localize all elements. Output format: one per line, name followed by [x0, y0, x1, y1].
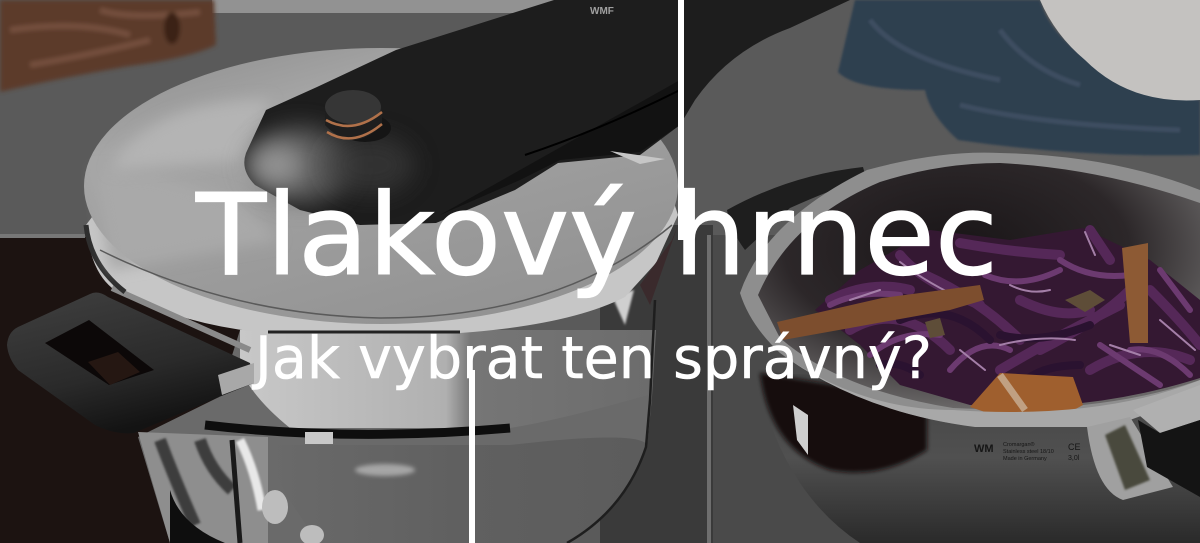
- right pot: [727, 153, 1200, 543]
- pot engraving: WM: [974, 443, 994, 455]
- pot engraving: 3,0l: [1068, 455, 1080, 462]
- subtitle: Jak vybrat ten správný?: [252, 324, 932, 392]
- black lid handle: [244, 0, 850, 225]
- pot engraving: [974, 441, 1081, 462]
- white vertical line bottom: [469, 370, 475, 543]
- pot engraving: Made in Germany: [1003, 456, 1047, 462]
- left pot handle: [7, 293, 254, 433]
- pressure cooker lid: [84, 48, 678, 350]
- left pot body: [138, 290, 656, 543]
- white vertical line top: [678, 0, 684, 240]
- right pot side handle: [1087, 385, 1200, 500]
- title: Tlakový hrnec: [195, 171, 998, 301]
- pot engraving: Cromargan®: [1003, 441, 1035, 448]
- logo on handle: WMF: [590, 6, 614, 17]
- pot engraving: Stainless steel 18/10: [1003, 449, 1054, 455]
- red cabbage and spices: [777, 228, 1200, 412]
- right pot rim front: [780, 353, 1200, 427]
- steam: [245, 143, 305, 187]
- wooden board: [0, 0, 216, 92]
- white bowl: [1040, 0, 1200, 100]
- pot engraving: CE: [1068, 442, 1081, 452]
- denim towel: [838, 0, 1200, 155]
